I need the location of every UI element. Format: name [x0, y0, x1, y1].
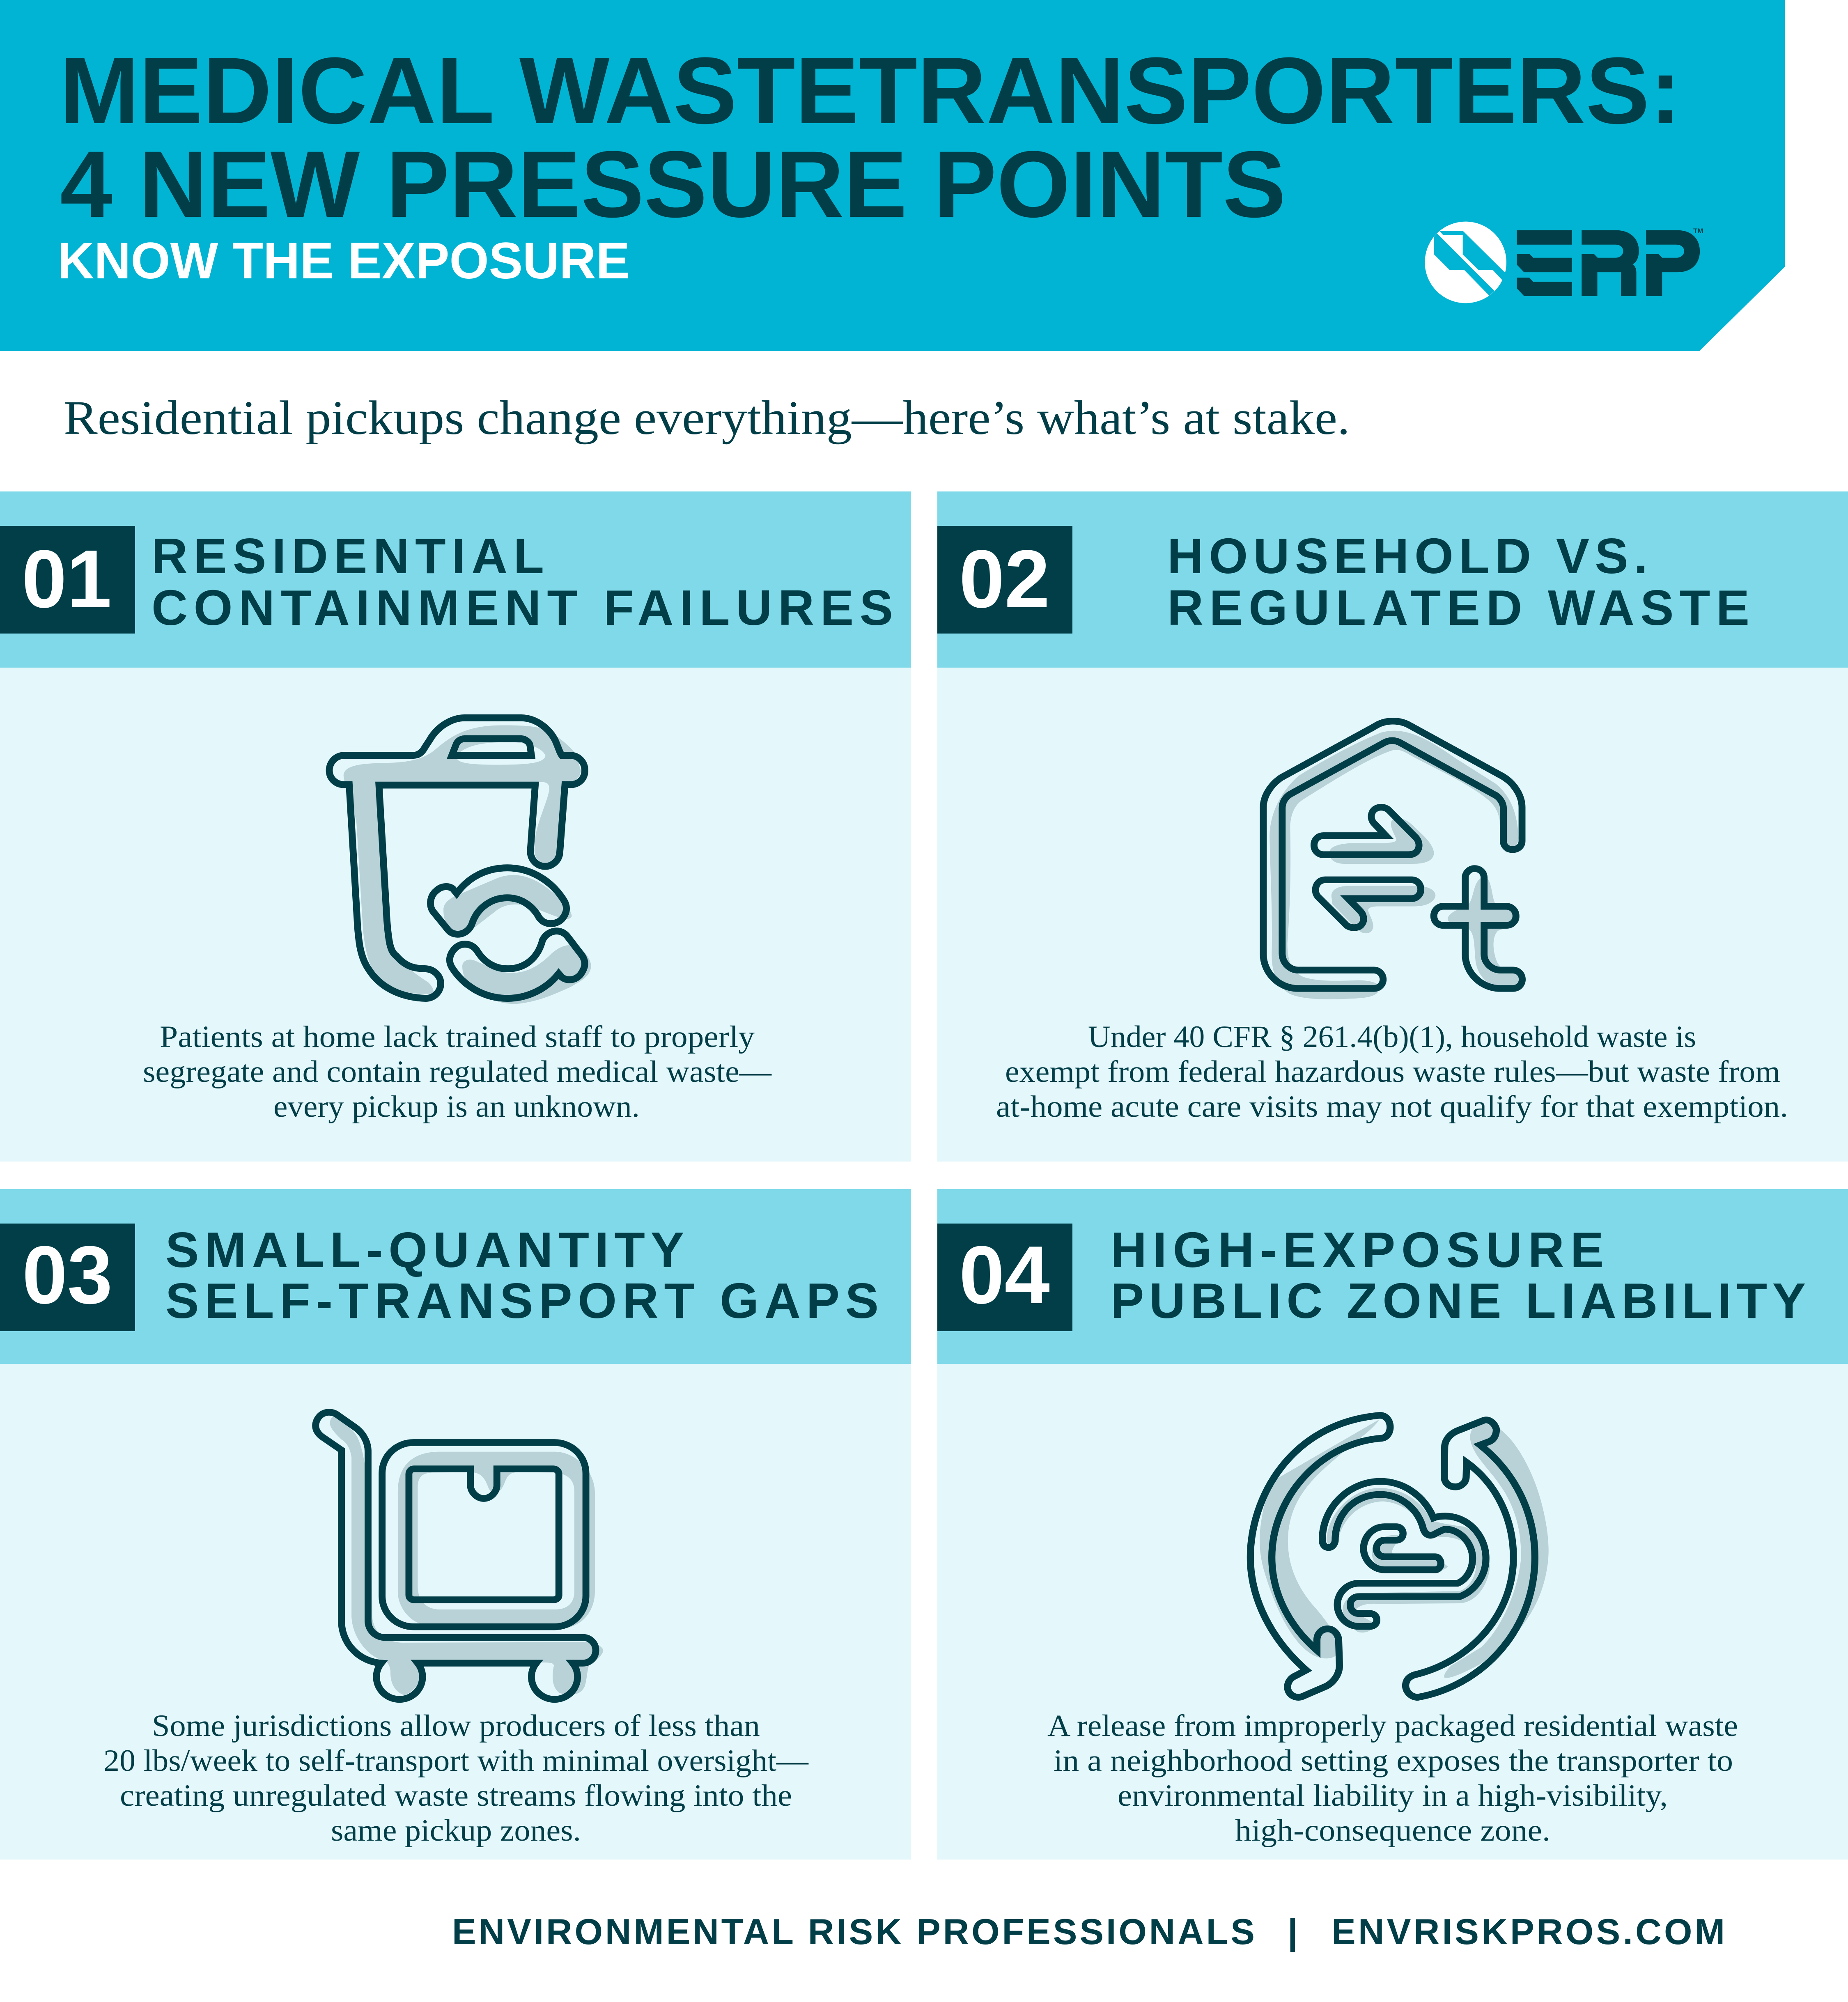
panel: 02 household vs regulated waste	[937, 491, 1848, 1162]
heading 04: PUBLIC ZONE LIABILITY	[1111, 1273, 1806, 1329]
number badge 01: 01	[22, 533, 112, 625]
text block 04: A release from improperly packaged residential waste	[1047, 1709, 1738, 1743]
heading 01: CONTAINMENT FAILURES	[152, 580, 893, 636]
text block 04	[1047, 1709, 1738, 1848]
heading 04	[1111, 1222, 1806, 1329]
text block 02: at-home acute care visits may not qualify for that exemption.	[996, 1090, 1788, 1124]
logo wordmark	[1517, 230, 1700, 296]
text block 04: environmental liability in a high-visibility,	[1118, 1779, 1668, 1813]
panel: 01 residential containment failures	[0, 491, 911, 1162]
heading 02: HOUSEHOLD VS.	[1167, 528, 1648, 584]
text block 01	[143, 1020, 772, 1124]
text block 03: same pickup zones.	[331, 1814, 581, 1848]
title: MEDICAL WASTETRANSPORTERS:	[60, 38, 1681, 143]
text block 01: Patients at home lack trained staff to properly	[160, 1020, 755, 1054]
footer: |	[1288, 1911, 1298, 1952]
heading 01	[152, 528, 893, 636]
heading 03: SELF-TRANSPORT GAPS	[165, 1273, 879, 1329]
number badge 03	[0, 1224, 135, 1331]
title	[60, 38, 1681, 237]
title: 4 NEW PRESSURE POINTS	[60, 131, 1286, 237]
text block 02: exempt from federal hazardous waste rules—but waste from	[1005, 1055, 1780, 1089]
text block 02: Under 40 CFR § 261.4(b)(1), household waste is	[1088, 1020, 1696, 1054]
heading 02: REGULATED WASTE	[1167, 580, 1749, 636]
text block 03	[103, 1709, 809, 1848]
logo: ERP	[1425, 222, 1703, 303]
heading 01: RESIDENTIAL	[152, 528, 544, 584]
subtitle: KNOW THE EXPOSURE	[57, 232, 630, 289]
number badge 01	[0, 526, 135, 634]
heading 03	[165, 1222, 879, 1329]
footer: ENVIRONMENTAL RISK PROFESSIONALS	[452, 1911, 1255, 1952]
footer: ENVRISKPROS.COM	[1331, 1911, 1725, 1952]
number badge 04	[937, 1224, 1072, 1331]
number badge 02: 02	[959, 533, 1050, 625]
panel: 04 high-exposure public zone liability	[937, 1189, 1848, 1860]
panel: 03 small-quantity self-transport gaps	[0, 1189, 911, 1860]
header banner	[0, 0, 1785, 351]
icon: logo emblem	[1425, 222, 1507, 303]
footer	[452, 1911, 1725, 1952]
heading 02	[1167, 528, 1749, 636]
text block 01: segregate and contain regulated medical waste—	[143, 1055, 772, 1089]
icon: bin with recycling arrows	[329, 718, 591, 1004]
heading 04: HIGH-EXPOSURE	[1111, 1222, 1604, 1278]
icon: house with exchange arrows and t	[1263, 721, 1525, 999]
icon: cart with box	[316, 1412, 603, 1699]
number badge 04: 04	[959, 1229, 1050, 1321]
tagline: Residential pickups change everything—here’s what’s at stake.	[64, 391, 1350, 445]
icon: circular arrows around cloud	[1250, 1415, 1549, 1697]
text block 04: in a neighborhood setting exposes the transporter to	[1054, 1744, 1733, 1778]
number badge 02	[937, 526, 1072, 634]
heading 03: SMALL-QUANTITY	[165, 1222, 684, 1278]
text block 02	[996, 1020, 1788, 1124]
trademark mark: TM	[1693, 227, 1703, 235]
number badge 03: 03	[22, 1229, 112, 1321]
text block 01: every pickup is an unknown.	[273, 1090, 640, 1124]
text block 04: high-consequence zone.	[1235, 1814, 1550, 1848]
text block 03: creating unregulated waste streams flowing into the	[120, 1779, 792, 1813]
text block 03: Some jurisdictions allow producers of less than	[152, 1709, 760, 1743]
text block 03: 20 lbs/week to self-transport with minimal oversight—	[103, 1744, 809, 1778]
